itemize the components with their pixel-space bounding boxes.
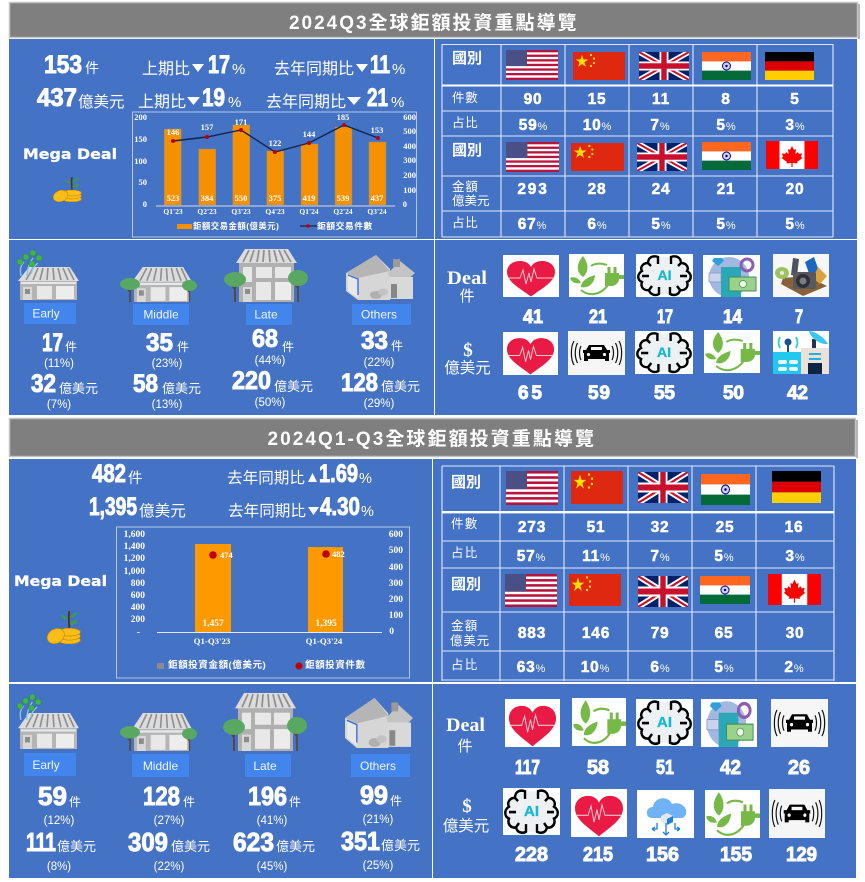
values: deal count row: 51 [656, 757, 674, 779]
table values: 3% [785, 117, 805, 134]
chart: quarterly mega deal: 185 [337, 112, 349, 122]
flags: by amount [506, 141, 818, 172]
Late stats: 196 [248, 781, 287, 811]
table grid [442, 44, 833, 237]
values: deal count row: 41 [523, 307, 543, 328]
values: amount row: 156 [646, 844, 679, 866]
table values: 16 [785, 519, 803, 536]
chart: quarterly mega deal: 300 [403, 155, 416, 165]
table values: 57% [517, 548, 546, 565]
Middle stats: 58 [133, 370, 158, 398]
chart: quarterly mega deal [132, 112, 416, 237]
Late stats [233, 781, 315, 873]
chart: quarterly mega deal: 157 [201, 122, 214, 132]
chart: quarterly mega deal: 500 [403, 126, 416, 136]
stage label: Early: Early [32, 306, 60, 320]
row labels: 億美元 [450, 634, 490, 648]
table values: 20 [786, 181, 804, 198]
chart: quarterly mega deal: Q2'24 [333, 207, 353, 216]
chart: quarterly mega deal: Q1'24 [299, 207, 319, 216]
stage label: Others: Others [361, 308, 397, 322]
row label: amount: 億美元 [444, 359, 491, 377]
row label: amount [443, 796, 489, 835]
table values: 67% [518, 216, 547, 233]
table values: 63% [517, 659, 546, 676]
row labels: 金額 [451, 618, 478, 633]
chart: quarterly mega deal: 523 [167, 193, 179, 203]
row label: amount [444, 340, 491, 377]
Middle stats: (27%) [154, 815, 185, 827]
Late stats: 億美元 [276, 839, 315, 854]
panel: Q3 country table [435, 39, 857, 239]
icon: late store [224, 249, 308, 302]
Middle stats: 件 [177, 340, 189, 354]
table values: 2% [784, 659, 804, 676]
icon: middle store [120, 713, 197, 751]
chart: quarterly mega deal: 171 [235, 117, 247, 127]
table values: 30 [786, 625, 804, 642]
table values: 32 [651, 519, 669, 536]
table values: 293 [517, 181, 549, 198]
flags: by deal count [506, 471, 821, 505]
table values: 10% [583, 117, 612, 134]
Q1-Q3 deal amount stat: 去年同期比 [228, 502, 306, 520]
Middle stats: (23%) [152, 358, 183, 370]
Q3 deal amount stat: 去年同期比 [266, 93, 346, 111]
chart: quarterly mega deal: 153 [371, 125, 383, 135]
row labels: 占比 [452, 215, 479, 230]
chart: year-to-date mega deal: 1,000 [124, 567, 145, 577]
chart: year-to-date mega deal: 400 [131, 603, 145, 613]
icons: amount row [503, 330, 829, 375]
Early stats: 億美元 [59, 381, 98, 396]
chart: quarterly mega deal: 200 [134, 112, 147, 122]
chart: quarterly mega deal: 0 [403, 199, 407, 209]
chart: year-to-date mega deal: 200 [131, 615, 145, 625]
chart: quarterly mega deal: 50 [138, 177, 147, 187]
Middle stats: (22%) [154, 861, 185, 873]
table values: 11% [582, 548, 610, 565]
chart: quarterly mega deal: 539 [337, 193, 349, 203]
chart: year-to-date mega deal: 474 [220, 550, 234, 560]
row labels: 國別 [451, 474, 481, 491]
stage label: Middle [133, 304, 189, 325]
Q3 deal count stat: % [232, 61, 245, 78]
Q1-Q3 deal amount stat [89, 493, 374, 521]
values: deal count row [523, 307, 803, 328]
table values: 65 [715, 625, 733, 642]
Q3 deal count stat: % [392, 61, 405, 78]
table values: 5% [714, 659, 734, 676]
table values: 5% [716, 117, 736, 134]
table values: 5% [651, 216, 671, 233]
stage label: Others [352, 304, 411, 325]
values: deal count row: 117 [515, 757, 540, 779]
Q3 deal count stat: 件 [85, 60, 99, 76]
values: amount row: 59 [588, 383, 610, 404]
Late stats: (44%) [255, 355, 286, 367]
Q3 deal count stat: 17 [208, 51, 230, 79]
row labels [452, 50, 490, 230]
Q3 deal count stat: 11 [370, 51, 390, 79]
Q1-Q3 deal amount stat: % [361, 504, 374, 520]
stage label: Early: Early [32, 758, 60, 772]
Others stats: 件 [390, 794, 402, 808]
icon: coins [45, 611, 80, 646]
Others stats: 128 [341, 369, 378, 397]
Q1-Q3 deal amount stat: 1,395 [89, 493, 137, 521]
table values: 5 [790, 91, 800, 108]
stage label: Middle [132, 754, 189, 777]
values: amount row: 129 [786, 844, 817, 866]
chart: year-to-date mega deal: 1,600 [124, 530, 145, 540]
Early stats: (7%) [47, 399, 71, 411]
table values [517, 91, 805, 233]
Q3 deal count stat: 153 [44, 51, 82, 79]
Middle stats: 件 [183, 795, 195, 809]
table values: 21 [717, 181, 735, 198]
Late stats: 件 [289, 795, 301, 809]
table values [517, 519, 805, 676]
values: deal count row: 14 [723, 307, 742, 328]
Early stats: 件 [69, 795, 81, 809]
Q1-Q3 deal amount stat: 4.30 [320, 493, 360, 521]
row labels [450, 474, 490, 672]
Early stats: (12%) [44, 815, 75, 827]
chart: quarterly mega deal: 600 [403, 112, 416, 122]
chart: quarterly mega deal: 550 [235, 193, 247, 203]
Mega Deal heading: Mega Deal [14, 574, 107, 590]
title: 2024Q1-Q3 [10, 418, 858, 458]
chart: year-to-date mega deal: 1,400 [124, 542, 145, 552]
Middle stats [133, 329, 201, 411]
values: deal count row: 26 [788, 757, 810, 779]
icons: amount row: AI [657, 344, 671, 360]
Others stats: 33 [361, 327, 388, 355]
flags: by amount [505, 574, 821, 607]
stage label: Others: Others [360, 759, 396, 773]
icons: deal count row: AI [657, 714, 672, 731]
Q1-Q3 deal count stat: 482 [92, 460, 126, 488]
chart: quarterly mega deal: 鉅額交易件數 [317, 220, 373, 231]
Mega Deal heading: Mega Deal [23, 147, 117, 163]
Q1-Q3 deal count stat: 件 [128, 470, 142, 487]
stage label: Late [246, 304, 292, 325]
table values: 51 [587, 519, 605, 536]
chart: quarterly mega deal: 400 [403, 141, 416, 151]
Middle stats: (13%) [152, 399, 183, 411]
panel: Q1-Q3 funding stages [9, 684, 432, 878]
row labels: 國別 [452, 142, 482, 159]
Others stats: 99 [360, 780, 388, 810]
chart: quarterly mega deal: 100 [134, 156, 147, 166]
chart: year-to-date mega deal: 800 [131, 579, 145, 589]
chart: quarterly mega deal: 0 [143, 199, 147, 209]
title: 2024Q3: 2024Q3全球鉅額投資重點導覽 [289, 11, 577, 34]
Q3 deal amount stat: 上期比 [138, 93, 186, 111]
icon: late store [223, 693, 307, 751]
Middle stats: 309 [128, 827, 168, 857]
chart: quarterly mega deal: 437 [371, 193, 384, 203]
Late stats: 623 [233, 827, 274, 857]
Early stats: 17 [42, 329, 63, 357]
chart: quarterly mega deal: 鉅額交易金額(億美元) [193, 221, 279, 231]
row labels: 占比 [451, 657, 478, 672]
Others stats [341, 327, 420, 410]
row labels: 國別 [451, 576, 481, 593]
chart: year-to-date mega deal: 482 [332, 549, 345, 559]
chart: year-to-date mega deal: 0 [389, 627, 394, 637]
Others stats: 億美元 [381, 838, 420, 853]
values: deal count row [515, 757, 810, 779]
chart: year-to-date mega deal [116, 527, 410, 678]
table values: 6% [650, 659, 670, 676]
chart: quarterly mega deal: 100 [403, 185, 416, 195]
values: amount row: 215 [583, 844, 613, 866]
chart: quarterly mega deal: 144 [303, 129, 316, 139]
panel: Q3 top industries [435, 240, 857, 415]
Q3 deal amount stat [37, 84, 404, 112]
chart: year-to-date mega deal: Q1-Q3'24 [306, 636, 343, 646]
stage label: Early [24, 753, 76, 776]
row labels: 件數 [451, 517, 478, 531]
chart: quarterly mega deal: 122 [269, 138, 281, 148]
Q3 deal amount stat: % [228, 94, 241, 111]
Middle stats: 35 [146, 329, 173, 357]
Early stats: 111 [26, 827, 56, 857]
Others stats: (25%) [363, 860, 394, 872]
chart: year-to-date mega deal: 100 [389, 611, 403, 621]
table values: 8 [721, 91, 731, 108]
table values: 5% [785, 216, 805, 233]
stage label: Others [351, 754, 410, 777]
table values: 10% [581, 659, 610, 676]
table values: 146 [582, 625, 610, 642]
row label: Deal: 件 [459, 288, 475, 305]
table values: 79 [651, 625, 669, 642]
values: amount row: 55 [654, 383, 675, 404]
Q3 deal count stat: 上期比 [142, 60, 190, 78]
Middle stats [128, 781, 210, 873]
Late stats [232, 325, 313, 409]
row label: amount: 億美元 [443, 817, 489, 835]
Early stats: 件 [65, 340, 77, 354]
panel: Q1-Q3 mega deal summary [9, 459, 432, 682]
table values: 24 [652, 181, 670, 198]
table grid [442, 466, 834, 681]
chart: year-to-date mega deal: Q1-Q3'23 [194, 636, 231, 646]
Late stats: (50%) [255, 397, 286, 409]
chart: quarterly mega deal: Q3'23 [231, 207, 251, 216]
Middle stats: 億美元 [162, 381, 201, 396]
icon: others house [345, 698, 413, 748]
stage label: Late: Late [254, 308, 278, 322]
row label: Deal: Deal [446, 715, 485, 736]
row labels: 占比 [451, 545, 478, 560]
values: amount row [515, 844, 817, 866]
table values: 273 [518, 519, 546, 536]
table values: 6% [587, 216, 607, 233]
flags: by deal count [506, 50, 814, 80]
Others stats: 件 [391, 339, 403, 353]
panel: Q3 funding stages [9, 240, 434, 415]
icon: middle store [120, 267, 197, 302]
Q1-Q3 deal amount stat: 億美元 [139, 502, 186, 520]
Late stats: 億美元 [274, 379, 313, 394]
table values: 7% [650, 117, 670, 134]
Others stats: (29%) [364, 398, 395, 410]
table values: 25 [716, 519, 734, 536]
chart: year-to-date mega deal: - [137, 628, 140, 638]
chart: quarterly mega deal: 146 [167, 127, 179, 137]
values: amount row: 65 [518, 383, 542, 404]
stage label: Middle: Middle [143, 759, 178, 773]
icon: coins [52, 177, 82, 204]
Middle stats: 128 [143, 781, 180, 811]
panel: Q3 mega deal summary [9, 39, 434, 239]
chart: quarterly mega deal: 384 [201, 193, 214, 203]
Q3 deal count stat [44, 51, 405, 79]
Late stats: 68 [252, 325, 278, 353]
Q3 deal amount stat: 437 [37, 84, 77, 112]
Early stats: (11%) [44, 358, 74, 370]
row label: Deal: Deal [447, 268, 487, 289]
chart: year-to-date mega deal: 600 [131, 591, 145, 601]
Early stats: 59 [38, 781, 67, 811]
Others stats: (22%) [364, 357, 395, 369]
chart: quarterly mega deal: 150 [134, 134, 147, 144]
table values: 883 [518, 625, 546, 642]
row labels: 國別 [452, 50, 482, 67]
Early stats: (8%) [47, 861, 71, 873]
row label: amount: $ [462, 796, 472, 817]
values: amount row [518, 383, 808, 404]
panel: Q1-Q3 top industries [433, 684, 856, 878]
table values: 28 [588, 181, 606, 198]
chart: quarterly mega deal: Q3'24 [367, 207, 387, 216]
table values: 5% [714, 548, 734, 565]
Others stats: 億美元 [381, 379, 420, 394]
table values: 7% [650, 548, 670, 565]
stage label: Late: Late [253, 759, 277, 773]
chart: year-to-date mega deal: 鉅額投資金額(億美元) [168, 659, 266, 671]
icons: deal count row [503, 254, 829, 297]
chart: quarterly mega deal: Q4'23 [265, 207, 285, 216]
Q3 deal amount stat: 億美元 [78, 93, 125, 111]
Q1-Q3 deal count stat: % [359, 471, 372, 487]
Q1-Q3 deal count stat [92, 460, 372, 488]
table values: 11 [652, 91, 670, 108]
icon: early store [17, 694, 79, 749]
chart: quarterly mega deal: 200 [403, 170, 416, 180]
title: 2024Q1-Q3: 2024Q1-Q3全球鉅額投資重點導覽 [268, 427, 594, 450]
icons: amount row: AI [524, 803, 539, 820]
icons: deal count row [505, 698, 828, 747]
stage label: Early [24, 303, 76, 324]
Others stats: 351 [341, 826, 380, 856]
Others stats: (21%) [363, 814, 394, 826]
values: deal count row: 42 [720, 757, 741, 779]
Q3 deal amount stat: 21 [367, 84, 388, 112]
row label: Deal [447, 268, 487, 305]
row label: Deal [446, 715, 485, 755]
values: amount row: 155 [720, 844, 752, 866]
Late stats: (41%) [257, 815, 288, 827]
row label: Deal: 件 [457, 738, 473, 755]
table values: 5% [716, 216, 736, 233]
chart: quarterly mega deal: 375 [269, 193, 281, 203]
values: deal count row: 7 [795, 307, 803, 328]
values: amount row: 50 [723, 383, 744, 404]
table values: 15 [588, 91, 606, 108]
row labels: 占比 [452, 115, 479, 130]
row labels: 億美元 [452, 194, 490, 208]
Early stats: 32 [31, 370, 56, 398]
chart: year-to-date mega deal: 400 [389, 563, 403, 573]
values: amount row: 228 [515, 844, 548, 866]
chart: year-to-date mega deal: 200 [389, 595, 403, 605]
table values: 3% [785, 548, 805, 565]
Q3 deal count stat: 去年同期比 [274, 60, 354, 78]
Others stats [341, 780, 420, 872]
Q1-Q3 deal count stat: 去年同期比 [227, 469, 305, 487]
Early stats: 億美元 [57, 839, 96, 854]
panel: Q1-Q3 country table [433, 459, 856, 682]
icons: deal count row: AI [658, 267, 672, 283]
row labels: 件數 [452, 91, 479, 105]
chart: year-to-date mega deal: 1,457 [202, 619, 224, 629]
stage label: Late [245, 754, 291, 777]
chart: quarterly mega deal: Q2'23 [197, 207, 217, 216]
chart: year-to-date mega deal: 300 [389, 579, 403, 589]
values: deal count row: 17 [657, 307, 673, 328]
table values: 90 [524, 91, 542, 108]
Q1-Q3 deal count stat: 1.69 [319, 460, 358, 488]
chart: year-to-date mega deal: 1,395 [315, 619, 337, 629]
values: amount row: 42 [787, 383, 808, 404]
values: deal count row: 21 [589, 307, 607, 328]
row label: amount: $ [463, 340, 473, 361]
chart: year-to-date mega deal: 1,200 [124, 554, 145, 564]
table values: 59% [519, 117, 548, 134]
icons: amount row [503, 788, 825, 838]
icon: early store [17, 250, 79, 300]
chart: quarterly mega deal: 419 [303, 193, 315, 203]
Middle stats: 億美元 [171, 839, 210, 854]
Early stats [31, 329, 98, 411]
icon: others house [346, 255, 415, 300]
Late stats: (45%) [257, 861, 288, 873]
title: 2024Q3 [10, 2, 860, 39]
Q3 deal amount stat: 19 [202, 84, 225, 112]
Early stats [26, 781, 96, 873]
chart: year-to-date mega deal: 500 [389, 546, 403, 556]
values: deal count row: 58 [587, 757, 609, 779]
Late stats: 件 [282, 340, 294, 354]
Q3 deal amount stat: % [391, 94, 404, 111]
row labels: 金額 [452, 179, 479, 194]
chart: year-to-date mega deal: 600 [389, 530, 403, 540]
chart: year-to-date mega deal: 鉅額投資件數 [305, 659, 366, 671]
Late stats: 220 [232, 367, 271, 395]
chart: quarterly mega deal: Q1'23 [163, 207, 183, 216]
stage label: Middle: Middle [143, 308, 179, 322]
